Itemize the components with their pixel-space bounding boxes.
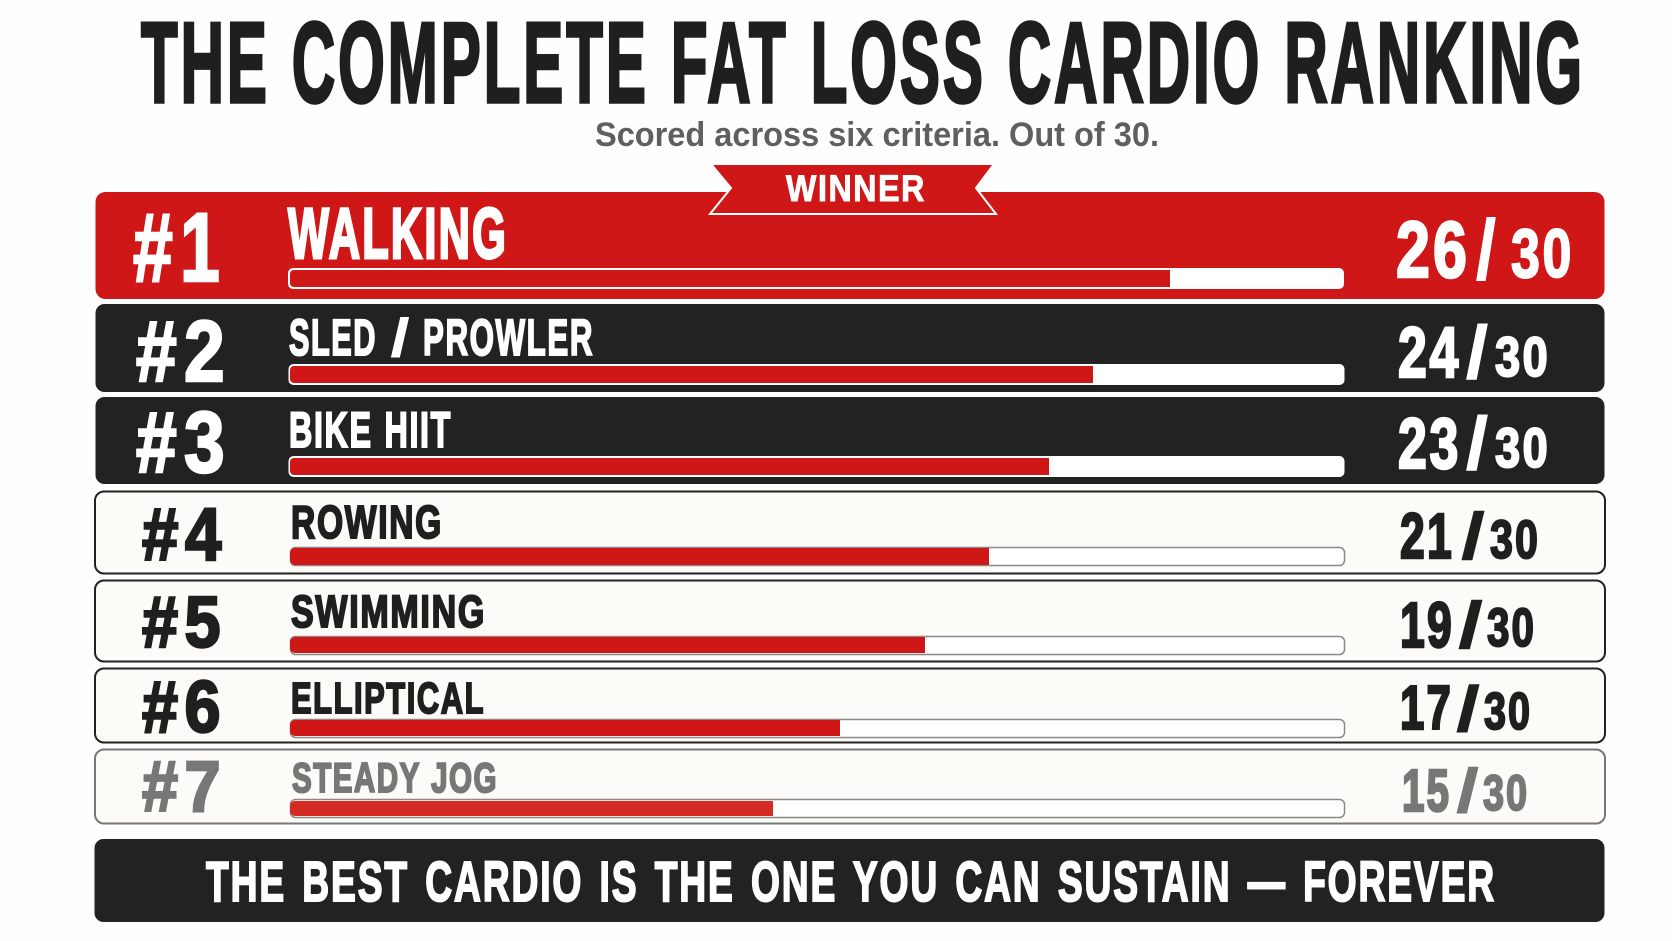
row 7: steady jog bbox=[95, 748, 1605, 827]
winner label: WINNER bbox=[786, 168, 926, 209]
row 2: sled / prowler bbox=[96, 304, 1604, 400]
row 3: bike hiit bbox=[96, 395, 1604, 491]
score 17/30: / bbox=[1456, 673, 1480, 745]
score 17/30: 30 bbox=[1484, 683, 1532, 741]
score 26/30: / bbox=[1476, 203, 1496, 297]
score 19/30 bbox=[1400, 588, 1536, 662]
score 24/30: / bbox=[1466, 311, 1488, 394]
name: sled / prowler: SLED bbox=[289, 309, 377, 366]
rank 2: #2 bbox=[136, 304, 232, 400]
score 19/30: 19 bbox=[1400, 589, 1454, 661]
name: steady jog: STEADY JOG bbox=[292, 754, 498, 801]
rank 4: #4 bbox=[142, 493, 228, 576]
score 23/30: 30 bbox=[1495, 416, 1550, 479]
rank 6: #6 bbox=[142, 667, 227, 748]
name: swimming: SWIMMING bbox=[291, 586, 486, 637]
score bar 17 of 30 bbox=[290, 720, 1344, 738]
rank 5: #5 bbox=[142, 583, 227, 663]
score 24/30: 30 bbox=[1495, 325, 1550, 388]
row 6: elliptical bbox=[95, 667, 1605, 748]
score 19/30: 30 bbox=[1487, 598, 1536, 658]
score 15/30: 30 bbox=[1483, 765, 1529, 821]
score 23/30: 23 bbox=[1398, 405, 1461, 484]
footer banner bbox=[94, 839, 1604, 922]
rank 7: #7 bbox=[142, 748, 227, 827]
score 21/30: 21 bbox=[1400, 500, 1454, 572]
score 23/30: / bbox=[1466, 402, 1488, 485]
score 23/30 bbox=[1398, 402, 1550, 485]
score bar 15 of 30 bbox=[290, 800, 1344, 818]
name: sled / prowler: PROWLER bbox=[423, 309, 594, 366]
score 26/30: 26 bbox=[1396, 205, 1470, 294]
rank 1: #1 bbox=[133, 193, 227, 302]
name: sled / prowler bbox=[289, 309, 594, 368]
score 15/30: / bbox=[1456, 757, 1479, 826]
score 21/30 bbox=[1400, 499, 1540, 573]
score 17/30: 17 bbox=[1400, 674, 1453, 743]
score 15/30 bbox=[1402, 757, 1529, 826]
score bar 21 of 30 bbox=[290, 548, 1344, 566]
score 21/30: / bbox=[1461, 499, 1485, 573]
name: rowing: ROWING bbox=[291, 496, 443, 548]
score bar 19 of 30 bbox=[290, 636, 1344, 654]
score 19/30: / bbox=[1458, 588, 1483, 662]
score bar 24 of 30 bbox=[288, 364, 1344, 385]
score 24/30 bbox=[1398, 311, 1550, 394]
score 15/30: 15 bbox=[1402, 758, 1451, 824]
score 24/30: 24 bbox=[1398, 314, 1461, 393]
row 4: rowing bbox=[95, 492, 1605, 576]
score 21/30: 30 bbox=[1490, 510, 1540, 570]
row 5: swimming bbox=[95, 580, 1605, 663]
score bar 26 of 30 bbox=[288, 268, 1344, 289]
winner ribbon bbox=[710, 164, 996, 214]
subtitle: Scored across six criteria. Out of 30. bbox=[595, 116, 1159, 154]
name: elliptical: ELLIPTICAL bbox=[291, 674, 485, 723]
rank 3: #3 bbox=[136, 395, 232, 491]
score bar 23 of 30 bbox=[288, 456, 1344, 477]
name: walking: WALKING bbox=[288, 195, 508, 274]
name: bike hiit: BIKE HIIT bbox=[289, 402, 452, 458]
score 26/30 bbox=[1396, 203, 1574, 297]
score 17/30 bbox=[1400, 673, 1532, 745]
name: sled / prowler: / bbox=[391, 309, 409, 368]
score 26/30: 30 bbox=[1511, 215, 1574, 292]
row 1: walking bbox=[96, 192, 1604, 302]
